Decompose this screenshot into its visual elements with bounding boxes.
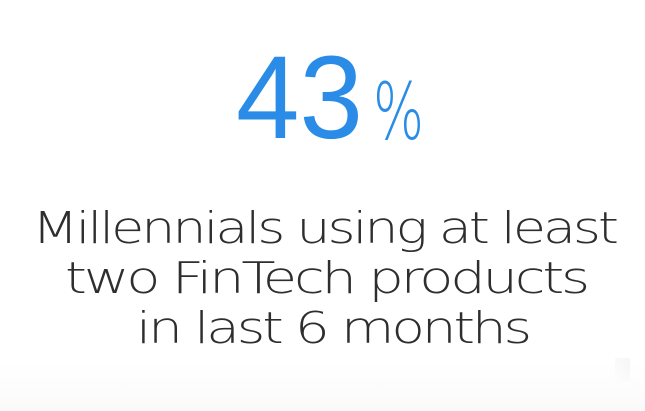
description text [32,203,618,354]
faint smudge [615,358,630,381]
big number: 43 [236,32,363,164]
bottom fade band [0,362,645,411]
percent sign: % [373,68,424,158]
line 2: two FinTech products [65,253,587,304]
line 1: Millennials using at least [32,203,618,254]
line 3: in last 6 months [136,303,529,354]
statistic: 43 percent [236,32,424,164]
